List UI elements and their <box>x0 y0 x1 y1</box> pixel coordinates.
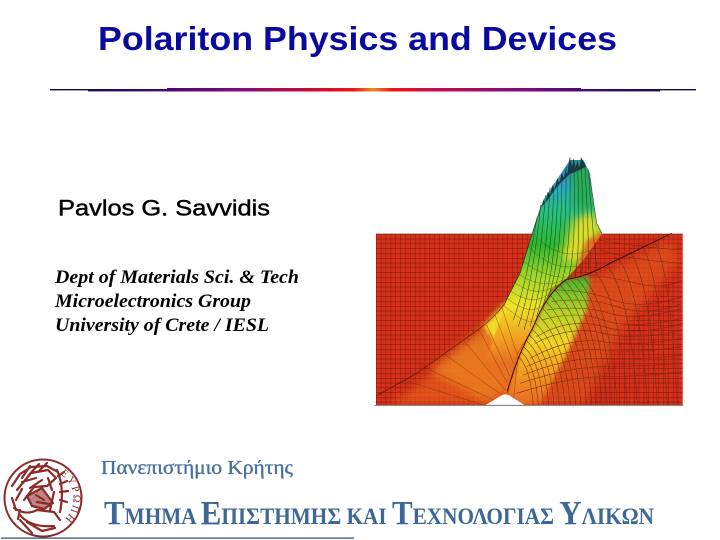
right-side curved mesh <box>517 238 683 405</box>
flat red surface <box>376 234 683 405</box>
seal lettering: ΕΥΡΩΠΗ <box>62 468 80 524</box>
3D polariton surface plot <box>375 157 683 405</box>
author name: Pavlos G. Savvidis <box>58 196 270 220</box>
university seal <box>4 458 82 538</box>
department name in Greek: ΤΜΗΜΑ ΕΠΙΣΤΗΜΗΣ ΚΑΙ ΤΕΧΝΟΛΟΓΙΑΣ ΥΛΙΚΩΝ <box>104 495 654 532</box>
main peak <box>485 160 602 393</box>
dark ridge lines <box>376 303 505 396</box>
footer rule <box>1 538 354 539</box>
orange glow under the ridges <box>390 330 528 405</box>
affiliation text <box>54 268 299 336</box>
peak outline <box>505 205 542 303</box>
gradient divider rule <box>50 88 696 91</box>
left mound mesh lines <box>403 307 518 405</box>
affiliation text: University of Crete / IESL <box>55 316 269 336</box>
peak spikes <box>542 157 586 207</box>
university name in Greek: Πανεπιστήμιο Κρήτης <box>101 457 293 479</box>
top and bottom plot edges <box>376 233 683 235</box>
title: Polariton Physics and Devices <box>98 21 617 58</box>
affiliation text: Microelectronics Group <box>54 292 251 312</box>
affiliation text: Dept of Materials Sci. & Tech <box>54 268 299 288</box>
peak cross lines <box>503 233 592 322</box>
white notch <box>485 394 525 405</box>
seal figure drawing <box>12 463 68 533</box>
right yellow-green mound <box>507 277 590 405</box>
grid on surface <box>376 234 683 405</box>
peak mesh lines <box>513 157 597 330</box>
